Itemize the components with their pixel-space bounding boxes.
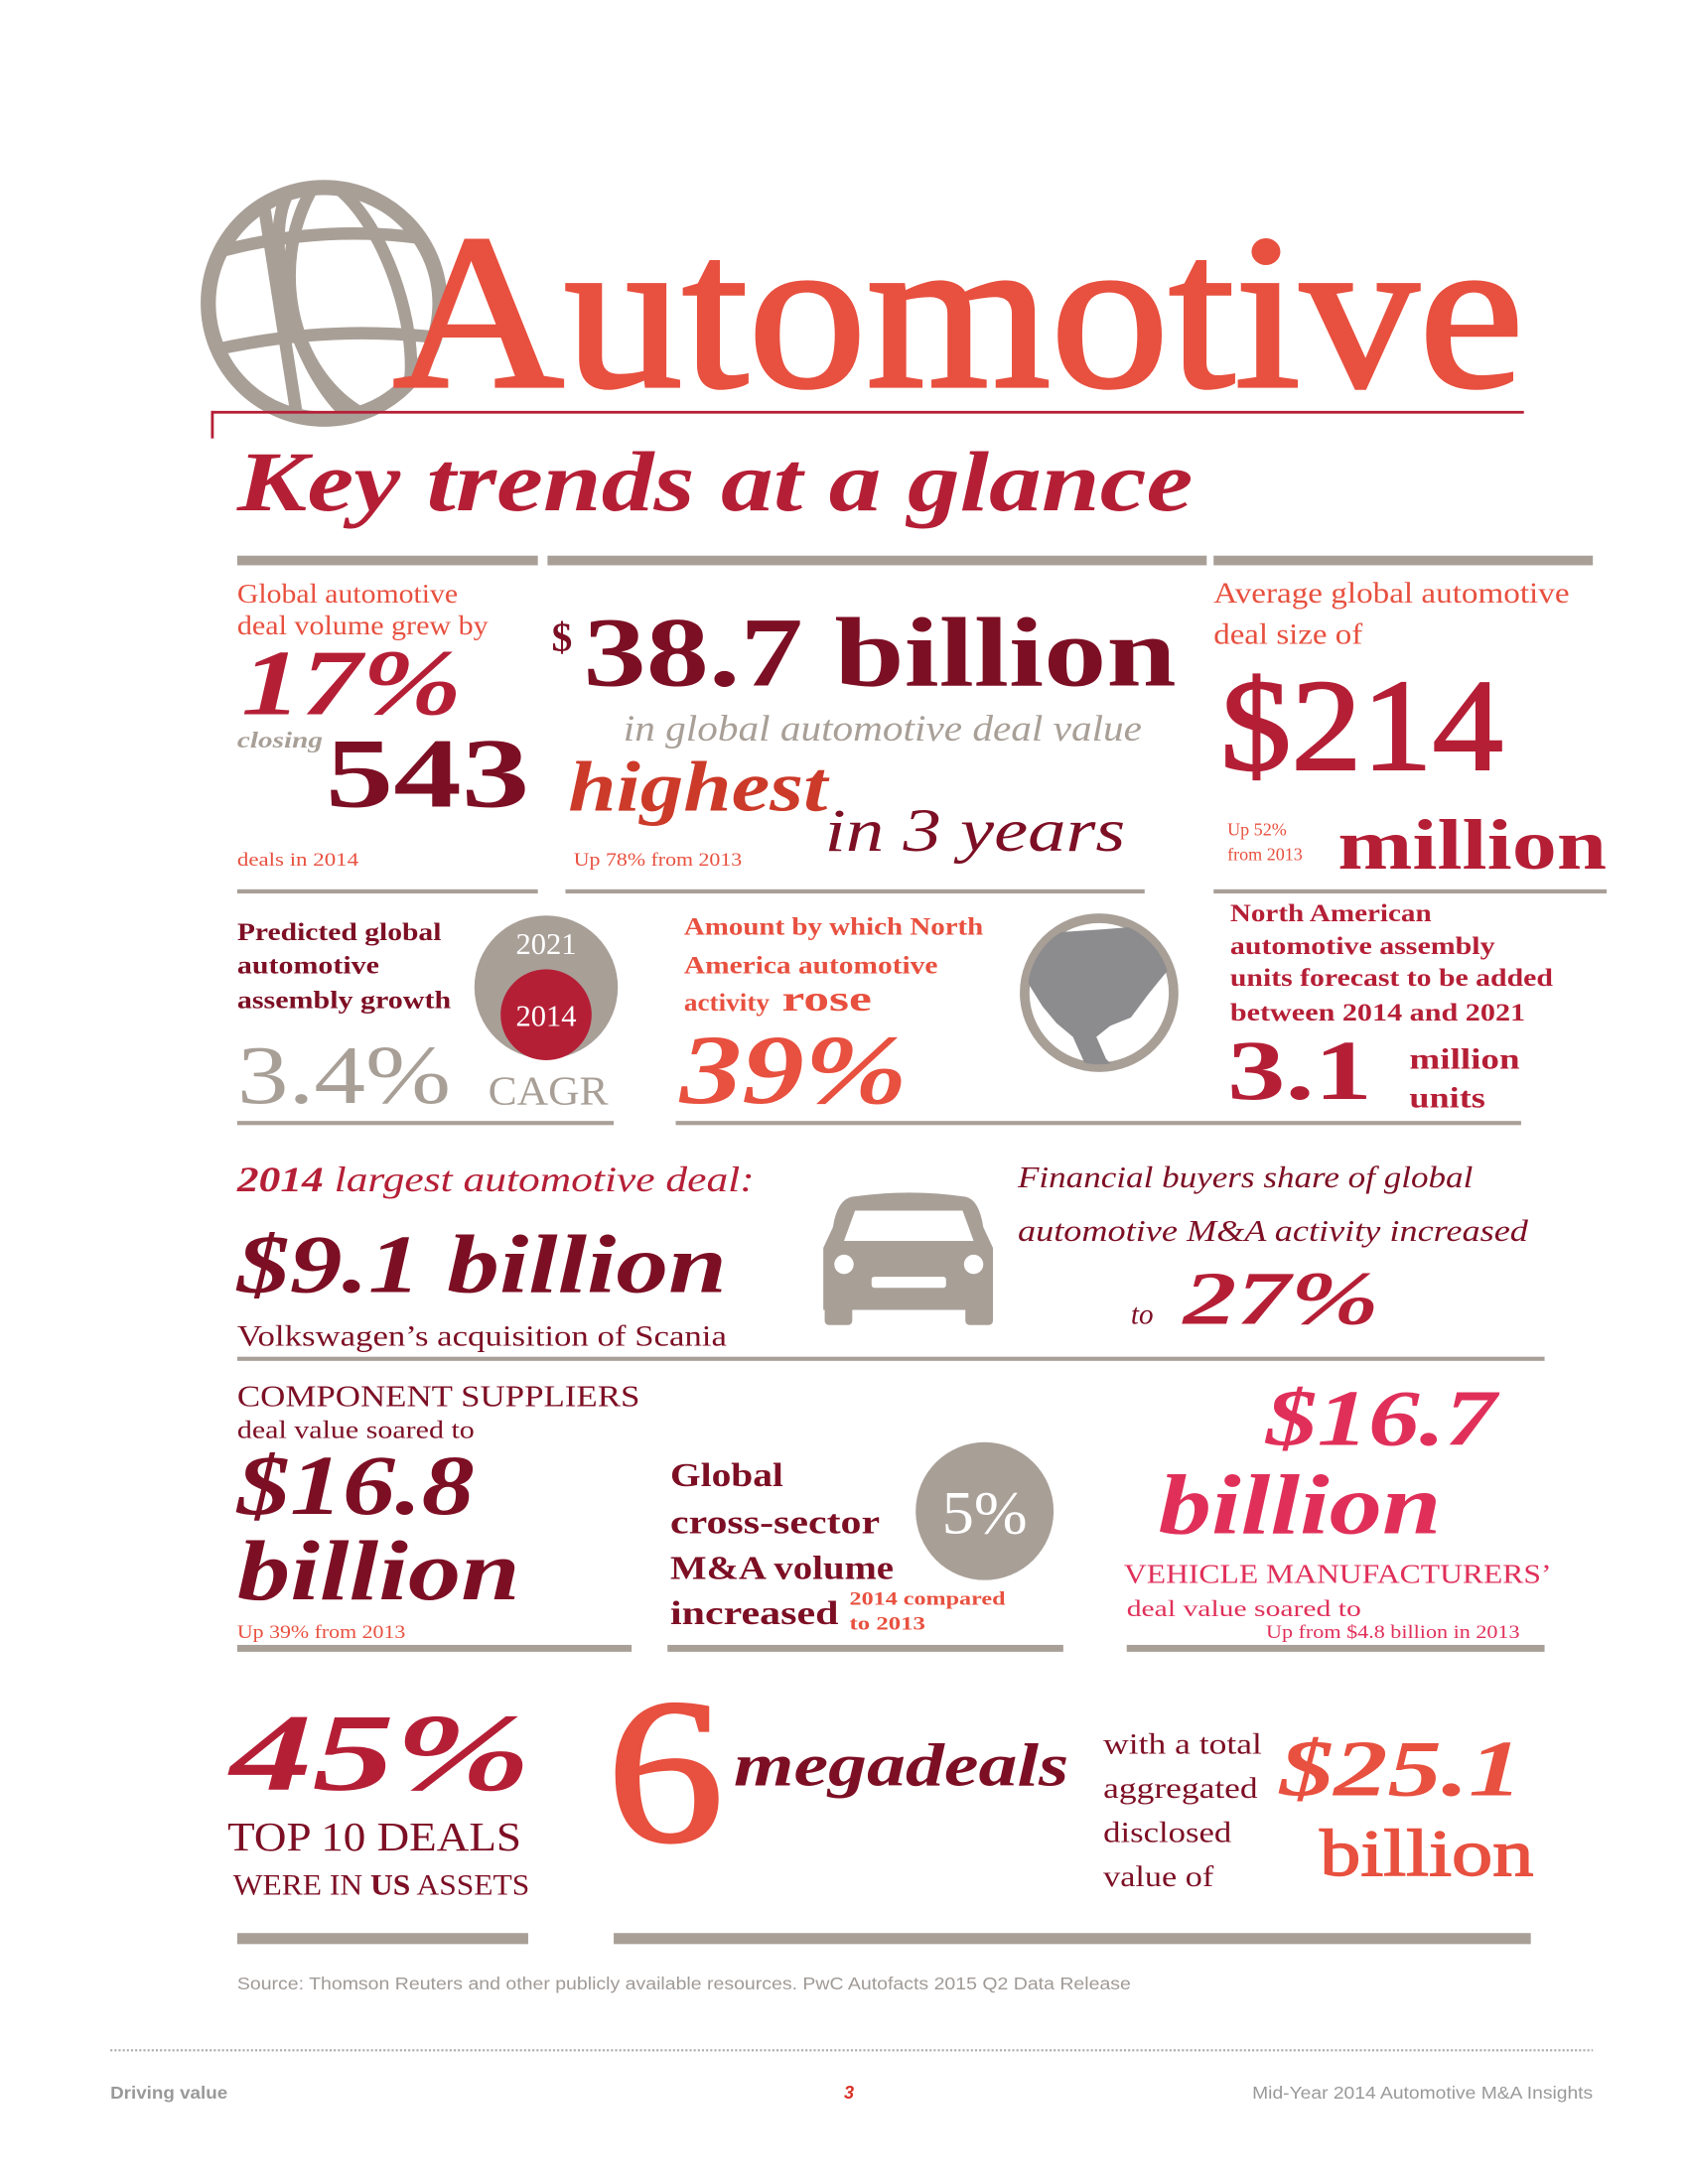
- panel: financial buyers: Financial buyers share of global: [1017, 1160, 1473, 1194]
- panel: largest deal: [236, 1160, 755, 1353]
- panel: component suppliers: Up 39% from 2013: [237, 1622, 405, 1643]
- panel: megadeals: $25.1: [1279, 1724, 1522, 1813]
- panel: vehicle manufacturers: deal value soared to: [1127, 1596, 1361, 1622]
- panel: NA activity: activity: [684, 990, 771, 1017]
- panel: deal value: highest: [568, 748, 830, 827]
- panel: NA activity: America automotive: [684, 953, 937, 980]
- source note: Source: Thomson Reuters and other publicly available resources. PwC Autofacts 2015 Q2 Data Release: [237, 1974, 1131, 1993]
- panel: top 10 deals: TOP 10 DEALS: [227, 1815, 521, 1860]
- title underline: [211, 411, 1524, 439]
- panel: assembly growth: Predicted global: [237, 919, 442, 946]
- panel: megadeals: [607, 1657, 1533, 1944]
- panel: deal volume: closing: [237, 728, 323, 753]
- panel: cross-sector: cross-sector: [670, 1504, 880, 1541]
- panel: financial buyers: 27%: [1182, 1256, 1379, 1340]
- panel: deal size: million: [1337, 805, 1607, 885]
- panel: cross-sector: 2014 compared: [850, 1589, 1006, 1610]
- panel: top 10 deals: [227, 1693, 531, 1944]
- panel: financial buyers: to: [1131, 1298, 1154, 1330]
- panel: cross-sector: to 2013: [850, 1614, 925, 1635]
- top bars: [237, 556, 1593, 565]
- panel: vehicle manufacturers: [1124, 1375, 1551, 1652]
- panel: vehicle manufacturers: Up from $4.8 billion in 2013: [1266, 1622, 1520, 1643]
- panel: NA activity: 39%: [678, 1015, 908, 1125]
- panel: cross-sector: Global: [670, 1457, 783, 1494]
- panel: top 10 deals: WERE IN US ASSETS: [233, 1869, 529, 1901]
- panel: NA activity: Amount by which North: [684, 914, 983, 941]
- panel: cross-sector: [667, 1442, 1063, 1652]
- panel: deal size: $214: [1220, 652, 1503, 798]
- panel: assembly growth: CAGR: [489, 1069, 609, 1115]
- icon: year circles: 2021: [515, 927, 577, 961]
- panel: largest deal: Volkswagen’s acquisition of Scania: [237, 1321, 727, 1353]
- footer: Mid-Year 2014 Automotive M&A Insights: [1252, 2083, 1594, 2103]
- panel: component suppliers: COMPONENT SUPPLIERS: [237, 1380, 639, 1414]
- panel: NA units: between 2014 and 2021: [1230, 1000, 1525, 1026]
- icon: 5% circle: [915, 1442, 1054, 1580]
- panel: deal size: Average global automotive: [1213, 578, 1570, 610]
- footer: 3: [844, 2083, 854, 2103]
- icon: globe: [201, 180, 447, 427]
- panel: cross-sector: increased: [670, 1595, 839, 1632]
- panel: megadeals: billion: [1320, 1818, 1533, 1890]
- panel: component suppliers: billion: [237, 1523, 520, 1618]
- icon: year circles: [475, 915, 618, 1060]
- panel: deal size: [1213, 578, 1607, 893]
- panel: NA units: units: [1409, 1082, 1485, 1114]
- panel: deal value: [552, 597, 1177, 893]
- footer: Driving value: [110, 2083, 228, 2103]
- panel: megadeals: aggregated: [1103, 1773, 1258, 1805]
- panel: financial buyers: [1017, 1160, 1529, 1340]
- panel: largest deal: 2014 largest automotive deal:: [236, 1160, 755, 1199]
- panel: assembly growth: automotive: [237, 953, 379, 980]
- panel: megadeals: megadeals: [734, 1733, 1068, 1800]
- panel: NA units: [676, 900, 1553, 1125]
- panel: vehicle manufacturers: VEHICLE MANUFACTURERS’: [1124, 1559, 1552, 1589]
- icon: car: [823, 1192, 993, 1325]
- panel: deal volume: 17%: [241, 631, 462, 735]
- panel: megadeals: disclosed: [1103, 1818, 1232, 1849]
- panel: deal size: deal size of: [1213, 619, 1363, 651]
- panel: megadeals: 6: [607, 1657, 724, 1886]
- panel: deal value: 38.7 billion: [584, 597, 1177, 707]
- panel: deal volume: [237, 579, 538, 893]
- subtitle: Key trends at a glance: [236, 434, 1193, 529]
- panel: vehicle manufacturers: $16.7: [1265, 1375, 1499, 1463]
- panel: deal size: Up 52%: [1227, 820, 1287, 840]
- panel: deal volume: deals in 2014: [237, 850, 358, 871]
- panel: NA units: million: [1409, 1043, 1520, 1075]
- panel: deal value: Up 78% from 2013: [574, 850, 742, 871]
- panel: component suppliers: [234, 1380, 639, 1652]
- panel: deal value: in global automotive deal value: [624, 709, 1142, 750]
- panel: NA units: North American: [1230, 900, 1432, 927]
- panel: megadeals: value of: [1103, 1861, 1214, 1893]
- footer: [110, 2083, 1594, 2103]
- panel: deal volume: Global automotive: [237, 579, 458, 610]
- panel: cross-sector: M&A volume: [670, 1550, 894, 1586]
- panel: deal value: in 3 years: [825, 798, 1125, 865]
- panel: megadeals: with a total: [1103, 1729, 1262, 1761]
- panel: financial buyers: automotive M&A activity increased: [1018, 1214, 1529, 1248]
- title: Automotive: [393, 191, 1524, 435]
- panel: assembly growth: 3.4%: [237, 1030, 451, 1122]
- icon: 5% circle: 5%: [942, 1480, 1028, 1547]
- panel: assembly growth: assembly growth: [237, 987, 451, 1014]
- panel: deal size: from 2013: [1227, 845, 1303, 865]
- icon: north america map: [1024, 918, 1174, 1078]
- panel: NA activity: [678, 914, 983, 1125]
- panel: NA units: units forecast to be added: [1230, 965, 1553, 992]
- icon: year circles: 2014: [515, 999, 577, 1032]
- panel: assembly growth: [237, 915, 618, 1125]
- panel: deal value: $: [552, 615, 572, 661]
- panel: deal volume: deal volume grew by: [237, 611, 489, 641]
- panel: component suppliers: deal value soared to: [237, 1418, 475, 1444]
- panel: deal volume: 543: [326, 718, 529, 828]
- panel: NA units: automotive assembly: [1230, 933, 1495, 960]
- panel: top 10 deals: 45%: [227, 1693, 531, 1815]
- panel: vehicle manufacturers: billion: [1159, 1456, 1441, 1552]
- panel: component suppliers: $16.8: [234, 1437, 475, 1533]
- panel: NA units: 3.1: [1227, 1023, 1372, 1118]
- panel: NA activity: rose: [782, 979, 872, 1019]
- panel: largest deal: $9.1 billion: [236, 1219, 727, 1310]
